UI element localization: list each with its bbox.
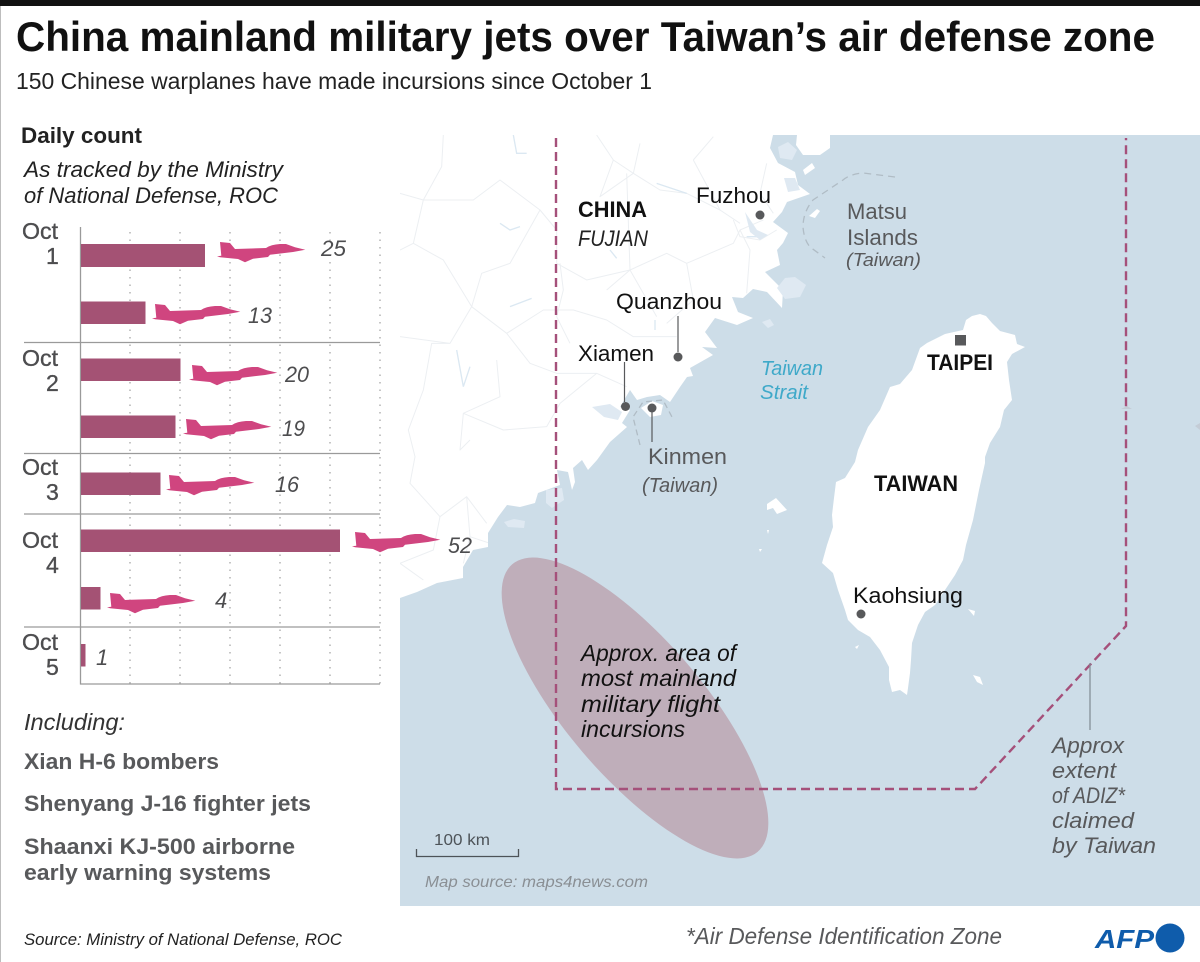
value labels: 4 <box>215 588 227 613</box>
value labels: 20 <box>284 362 310 387</box>
marker: Kaohsiung: Kaohsiung <box>853 583 963 608</box>
callout: ADIZ extent: by Taiwan <box>1052 833 1156 858</box>
label: Taiwan Strait <box>760 358 823 404</box>
date labels <box>22 218 59 680</box>
label: FUJIAN: FUJIAN <box>578 226 648 251</box>
aircraft types list: Xian H-6 bombers <box>24 749 219 774</box>
chart subheading <box>22 157 285 208</box>
aircraft types list: Shaanxi KJ-500 airborne <box>24 834 295 859</box>
chart heading: Daily count <box>21 123 143 148</box>
map land: China coast <box>400 135 810 598</box>
callout: ADIZ extent: extent <box>1052 758 1117 783</box>
value labels: 19 <box>282 416 305 441</box>
marker: Matsu Islands <box>803 173 921 270</box>
bars <box>81 244 340 666</box>
scale bar: 100 km <box>434 832 490 849</box>
marker: Matsu Islands: Islands <box>847 225 918 250</box>
callout: ADIZ extent: of ADIZ* <box>1052 783 1126 808</box>
marker: Kinmen: Kinmen <box>648 444 727 469</box>
logo: AFP <box>1094 924 1184 954</box>
marker: Taipei: TAIPEI <box>927 350 993 375</box>
value labels <box>96 236 472 670</box>
callout: ADIZ extent <box>1050 663 1156 858</box>
marker: Matsu Islands: Matsu <box>847 199 907 224</box>
chart subheading: As tracked by the Ministry <box>22 157 285 182</box>
source note: Source: Ministry of National Defense, ROC <box>24 930 343 949</box>
jet icons <box>107 242 440 613</box>
value labels: 13 <box>248 303 273 328</box>
label: Taiwan Strait: Taiwan <box>761 358 823 380</box>
ADIZ dashed boundary <box>556 138 1126 789</box>
bar chart: daily count <box>22 218 472 684</box>
date labels: Oct <box>22 629 59 655</box>
marker: Quanzhou: Quanzhou <box>616 289 722 314</box>
callout: incursion area: military flight <box>581 691 722 717</box>
marker: Matsu Islands: (Taiwan) <box>846 250 921 270</box>
date labels: 3 <box>46 479 59 505</box>
marker: Kinmen: (Taiwan) <box>642 475 718 497</box>
value labels: 25 <box>320 236 347 261</box>
label: CHINA: CHINA <box>578 197 647 222</box>
date labels: Oct <box>22 218 59 244</box>
panel: map <box>400 135 1200 906</box>
footnote: *Air Defense Identification Zone <box>686 923 1002 949</box>
chart subheading: of National Defense, ROC <box>24 183 278 208</box>
map source: Map source: maps4news.com <box>425 874 648 891</box>
aircraft types list <box>24 709 311 885</box>
Taiwan island <box>822 314 1025 695</box>
date labels: Oct <box>22 527 59 553</box>
aircraft types list: Shenyang J-16 fighter jets <box>24 791 311 816</box>
marker: Fuzhou: Fuzhou <box>696 183 771 208</box>
callout: incursion area <box>579 640 739 742</box>
marker: Fuzhou <box>696 183 771 220</box>
value labels: 16 <box>275 472 300 497</box>
map sea <box>400 135 1200 906</box>
callout: ADIZ extent: Approx <box>1050 733 1125 758</box>
marker: Quanzhou <box>616 289 722 362</box>
marker: Xiamen: Xiamen <box>578 341 654 366</box>
date labels: 5 <box>46 654 59 680</box>
pale bays and shallows <box>504 142 806 528</box>
callout: incursion area: Approx. area of <box>579 640 739 666</box>
date labels: 2 <box>46 370 59 396</box>
small islands near Taiwan <box>855 609 983 685</box>
logo: AFP: AFP <box>1094 924 1155 954</box>
Matsu island <box>809 209 820 218</box>
subtitle: 150 Chinese warplanes have made incursions since October 1 <box>16 68 652 94</box>
aircraft types list: early warning systems <box>24 860 271 885</box>
marker: Xiamen <box>578 341 654 411</box>
marker: Kinmen <box>633 400 727 497</box>
date labels: Oct <box>22 345 59 371</box>
coastal islands <box>641 135 830 552</box>
date labels: Oct <box>22 454 59 480</box>
map labels <box>416 173 1156 891</box>
incursion area ellipse <box>460 520 810 896</box>
value labels: 52 <box>448 533 472 558</box>
value labels: 1 <box>96 645 108 670</box>
scale bar <box>416 832 518 856</box>
callout: incursion area: incursions <box>581 716 686 742</box>
title: China mainland military jets over Taiwan’s air defense zone <box>16 13 1155 60</box>
date labels: 1 <box>46 243 59 269</box>
callout: incursion area: most mainland <box>581 665 737 691</box>
label: Taiwan Strait: Strait <box>760 382 809 404</box>
date labels: 4 <box>46 552 59 578</box>
label: TAIWAN: TAIWAN <box>874 471 958 496</box>
marker: Kaohsiung <box>853 583 963 618</box>
callout: ADIZ extent: claimed <box>1052 808 1135 833</box>
marker: Taipei <box>927 335 993 375</box>
aircraft types list: Including: <box>24 709 125 735</box>
